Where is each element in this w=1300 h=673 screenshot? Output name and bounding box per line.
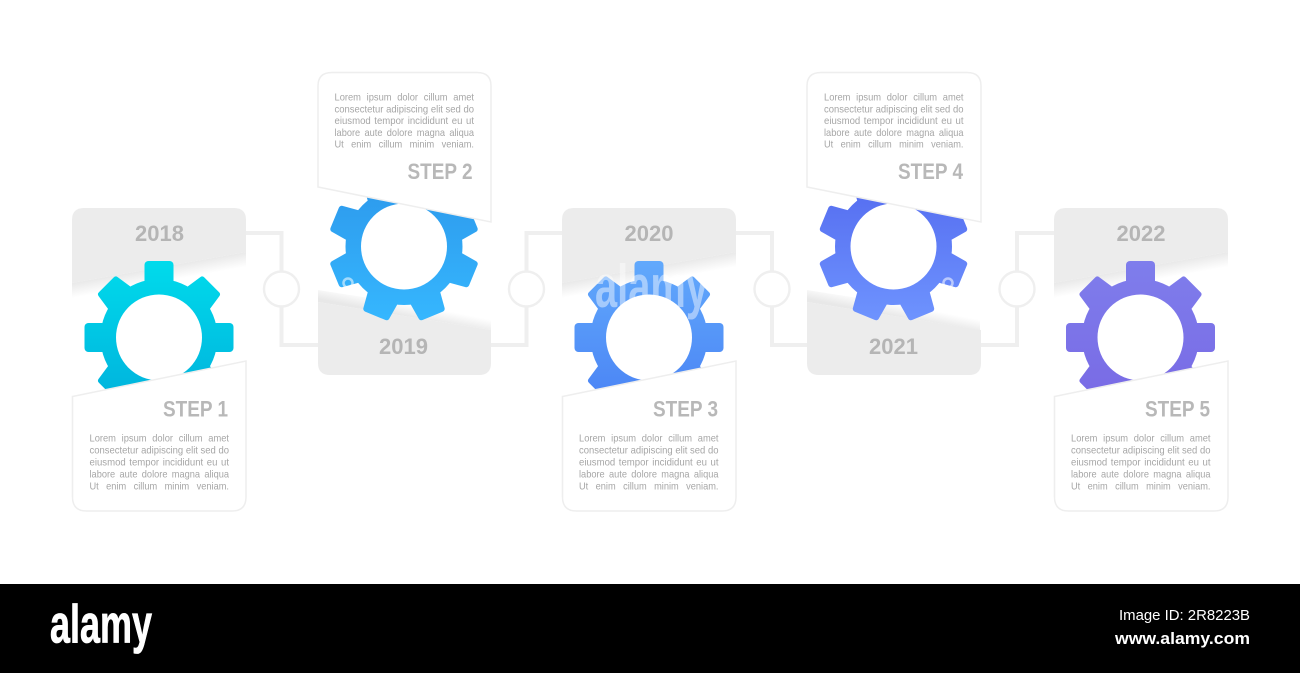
icon: gear blue [574,261,724,389]
card: step 2 text: STEP 2 [408,159,472,184]
icon: gear violet [1066,261,1215,390]
card: step 1 text [72,361,246,511]
card: step 5 text: labore aute dolore magna aliqua [1071,468,1211,480]
card: step 3 text [562,361,736,511]
year tab: 2019: 2019 [379,334,428,359]
year tab: 2019 [318,290,491,375]
card: step 4 text: Ut enim cillum minim veniam. [824,139,964,151]
card: step 1 text: consectetur adipiscing elit sed do [90,445,229,457]
card: step 3 text: consectetur adipiscing elit sed do [579,445,719,457]
footer logo: alamy [50,594,152,654]
card: step 5 text: consectetur adipiscing elit sed do [1071,445,1211,457]
connector: step 4 to step 5 [981,233,1054,345]
card: step 1 text: STEP 1 [163,397,228,422]
year tab: 2022 [1054,208,1228,298]
year tab: 2020: 2020 [625,221,673,246]
card: step 5 text [1054,361,1228,511]
card: step 1 text: eiusmod tempor incididunt eu ut [90,456,229,468]
panel: step 4 [807,72,981,375]
card: step 4 text: Lorem ipsum dolor cillum amet [824,92,964,104]
panel: step 2 [318,72,491,375]
card: step 2 text [318,72,491,222]
card: step 5 text: STEP 5 [1145,397,1210,422]
card: step 2 text: consectetur adipiscing elit sed do [334,104,474,116]
panel: step 5 [1054,208,1228,511]
year tab: 2022: 2022 [1117,221,1165,246]
connector: step 3 to step 4 [736,233,807,345]
card: step 3 text: Ut enim cillum minim veniam. [579,480,718,492]
card: step 1 text: labore aute dolore magna aliqua [90,468,229,480]
year tab: 2021 [807,290,981,375]
connector: step 2 to step 3 [491,233,562,345]
year tab: 2018: 2018 [135,221,184,246]
card: step 4 text: eiusmod tempor incididunt eu ut [824,115,964,127]
watermark fragment [344,278,352,288]
card: step 5 text: eiusmod tempor incididunt eu ut [1071,456,1211,468]
card: step 1 text: Lorem ipsum dolor cillum amet [90,433,229,445]
image id: Image ID: 2R8223B [1119,607,1250,624]
year tab: 2021: 2021 [869,334,918,359]
connector: step 1 to step 2 [246,233,318,345]
icon: gear cyan [84,261,234,389]
card: step 4 text: STEP 4 [898,159,964,184]
card: step 2 text: labore aute dolore magna aliqua [334,127,474,139]
year tab: 2020 [562,208,736,298]
icon: gear indigo [820,198,968,320]
footer bar [0,584,1300,673]
card: step 4 text: consectetur adipiscing elit sed do [824,104,964,116]
website: www.alamy.com [1114,629,1250,648]
watermark fragment [944,278,952,288]
card: step 3 text: Lorem ipsum dolor cillum amet [579,433,719,445]
card: step 2 text: eiusmod tempor incididunt eu ut [334,115,474,127]
card: step 2 text: Ut enim cillum minim veniam. [334,139,474,151]
card: step 3 text: STEP 3 [653,397,718,422]
card: step 5 text: Ut enim cillum minim veniam. [1071,480,1210,492]
panel: step 3 [562,208,736,511]
card: step 4 text: labore aute dolore magna aliqua [824,127,964,139]
card: step 2 text: Lorem ipsum dolor cillum amet [334,92,474,104]
year tab: 2018 [72,208,246,298]
icon: gear sky blue [330,198,478,320]
card: step 3 text: labore aute dolore magna aliqua [579,468,719,480]
panel: step 1 [72,208,246,511]
card: step 5 text: Lorem ipsum dolor cillum amet [1071,433,1211,445]
card: step 1 text: Ut enim cillum minim veniam. [90,480,229,492]
card: step 4 text [807,72,981,222]
card: step 3 text: eiusmod tempor incididunt eu ut [579,456,719,468]
watermark: alamy [595,253,708,320]
